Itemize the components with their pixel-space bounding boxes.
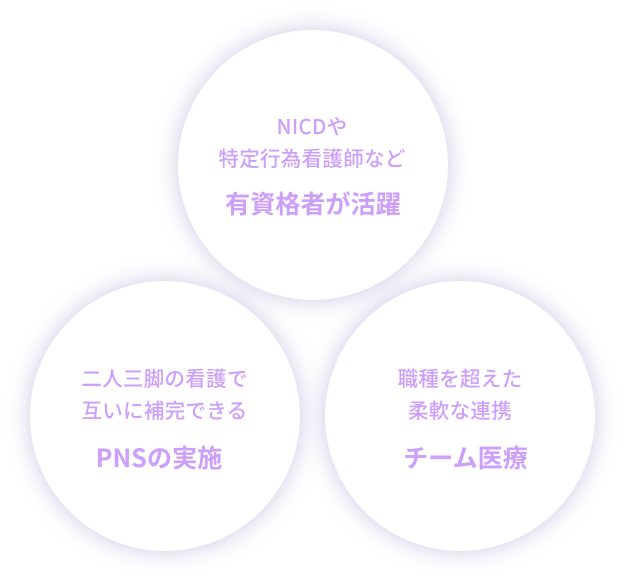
text: right circle line 2: 柔軟な連携 — [408, 394, 512, 424]
circle: top — [178, 30, 448, 300]
heading: top circle: 有資格者が活躍 — [225, 185, 401, 221]
circle: left — [30, 281, 300, 551]
text: left circle line 2: 互いに補完できる — [82, 394, 248, 424]
text: top circle line 1: NICDや — [277, 110, 347, 140]
heading: left circle: PNSの実施 — [96, 439, 222, 475]
text: left circle line 1: 二人三脚の看護で — [81, 362, 248, 392]
circle: right — [325, 281, 595, 551]
heading: right circle: チーム医療 — [403, 439, 528, 475]
text: right circle line 1: 職種を超えた — [398, 362, 522, 392]
text: top circle line 2: 特定行為看護師など — [218, 142, 406, 172]
